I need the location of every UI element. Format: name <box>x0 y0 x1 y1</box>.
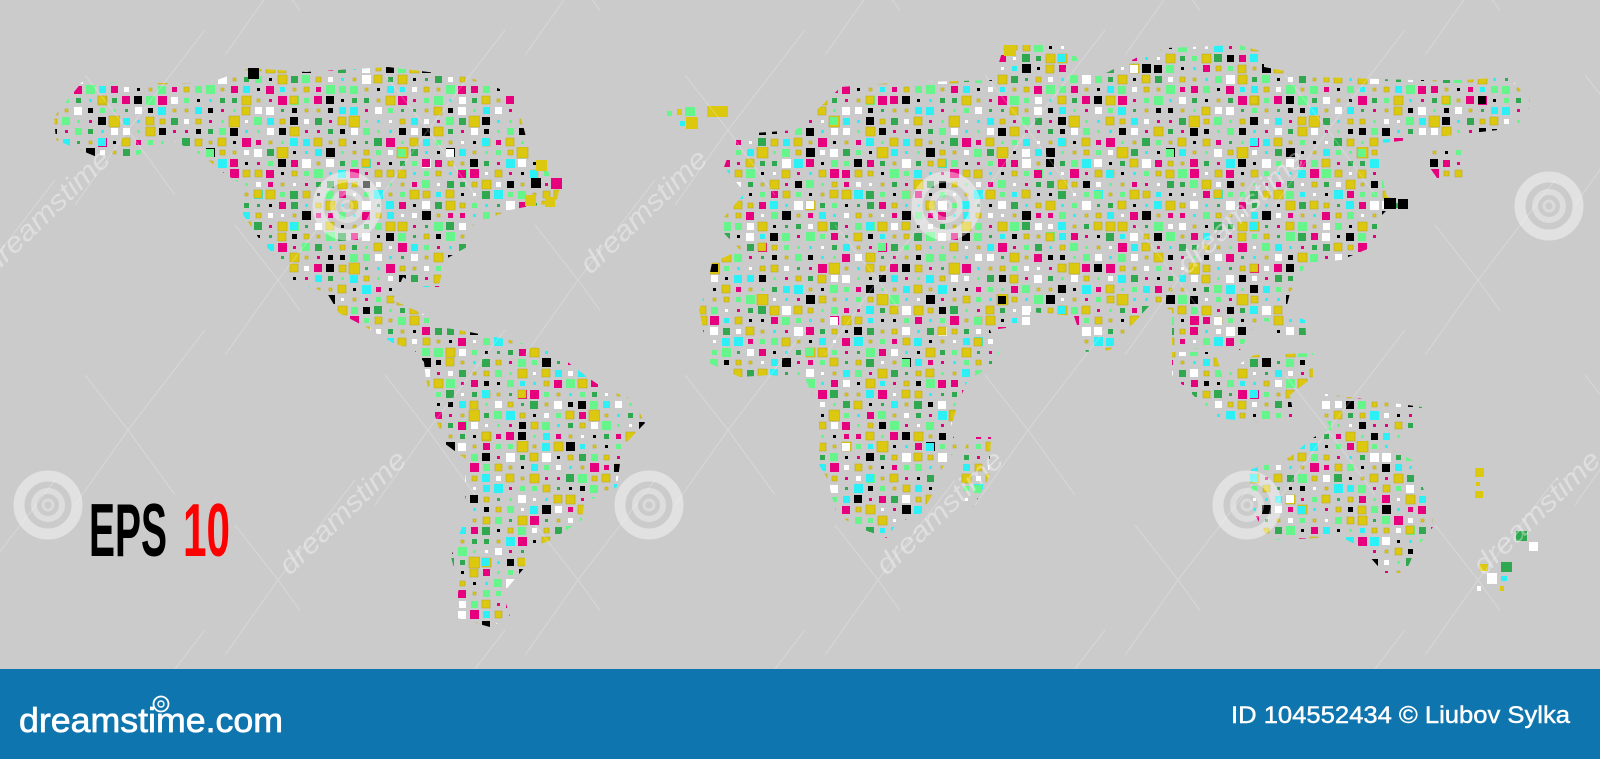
continent: Eurasia and Africa <box>699 45 1530 538</box>
islands: New Zealand <box>1477 531 1538 591</box>
footer logo: dreamstime.com: dreamstime.com <box>19 702 283 740</box>
footer bar <box>0 669 1600 759</box>
island: Iceland <box>667 106 728 129</box>
watermark text: dreamstime <box>1170 143 1311 280</box>
label: EPS 10: 10 <box>183 488 230 572</box>
island: Madagascar <box>958 437 991 508</box>
label: EPS 10: EPS <box>89 488 167 572</box>
continent: Americas <box>54 67 645 627</box>
watermark text: dreamstime <box>272 444 413 581</box>
watermark spirals <box>19 177 1578 534</box>
watermark text: dreamstime <box>1466 444 1600 581</box>
islands: Pacific strip <box>1475 468 1484 498</box>
watermark text: dreamstime <box>869 444 1010 581</box>
island: Japan <box>1428 148 1463 178</box>
footer credit: ID 104552434 © Liubov Sylka <box>1231 702 1570 729</box>
continent: Australia and New Guinea <box>1249 393 1433 573</box>
watermark text: dreamstime <box>573 143 714 280</box>
watermark text <box>0 143 1600 581</box>
world map of coloured squares <box>54 45 1538 627</box>
accent squares on coasts <box>248 45 1408 209</box>
islands: Southeast Asia <box>1172 352 1313 423</box>
